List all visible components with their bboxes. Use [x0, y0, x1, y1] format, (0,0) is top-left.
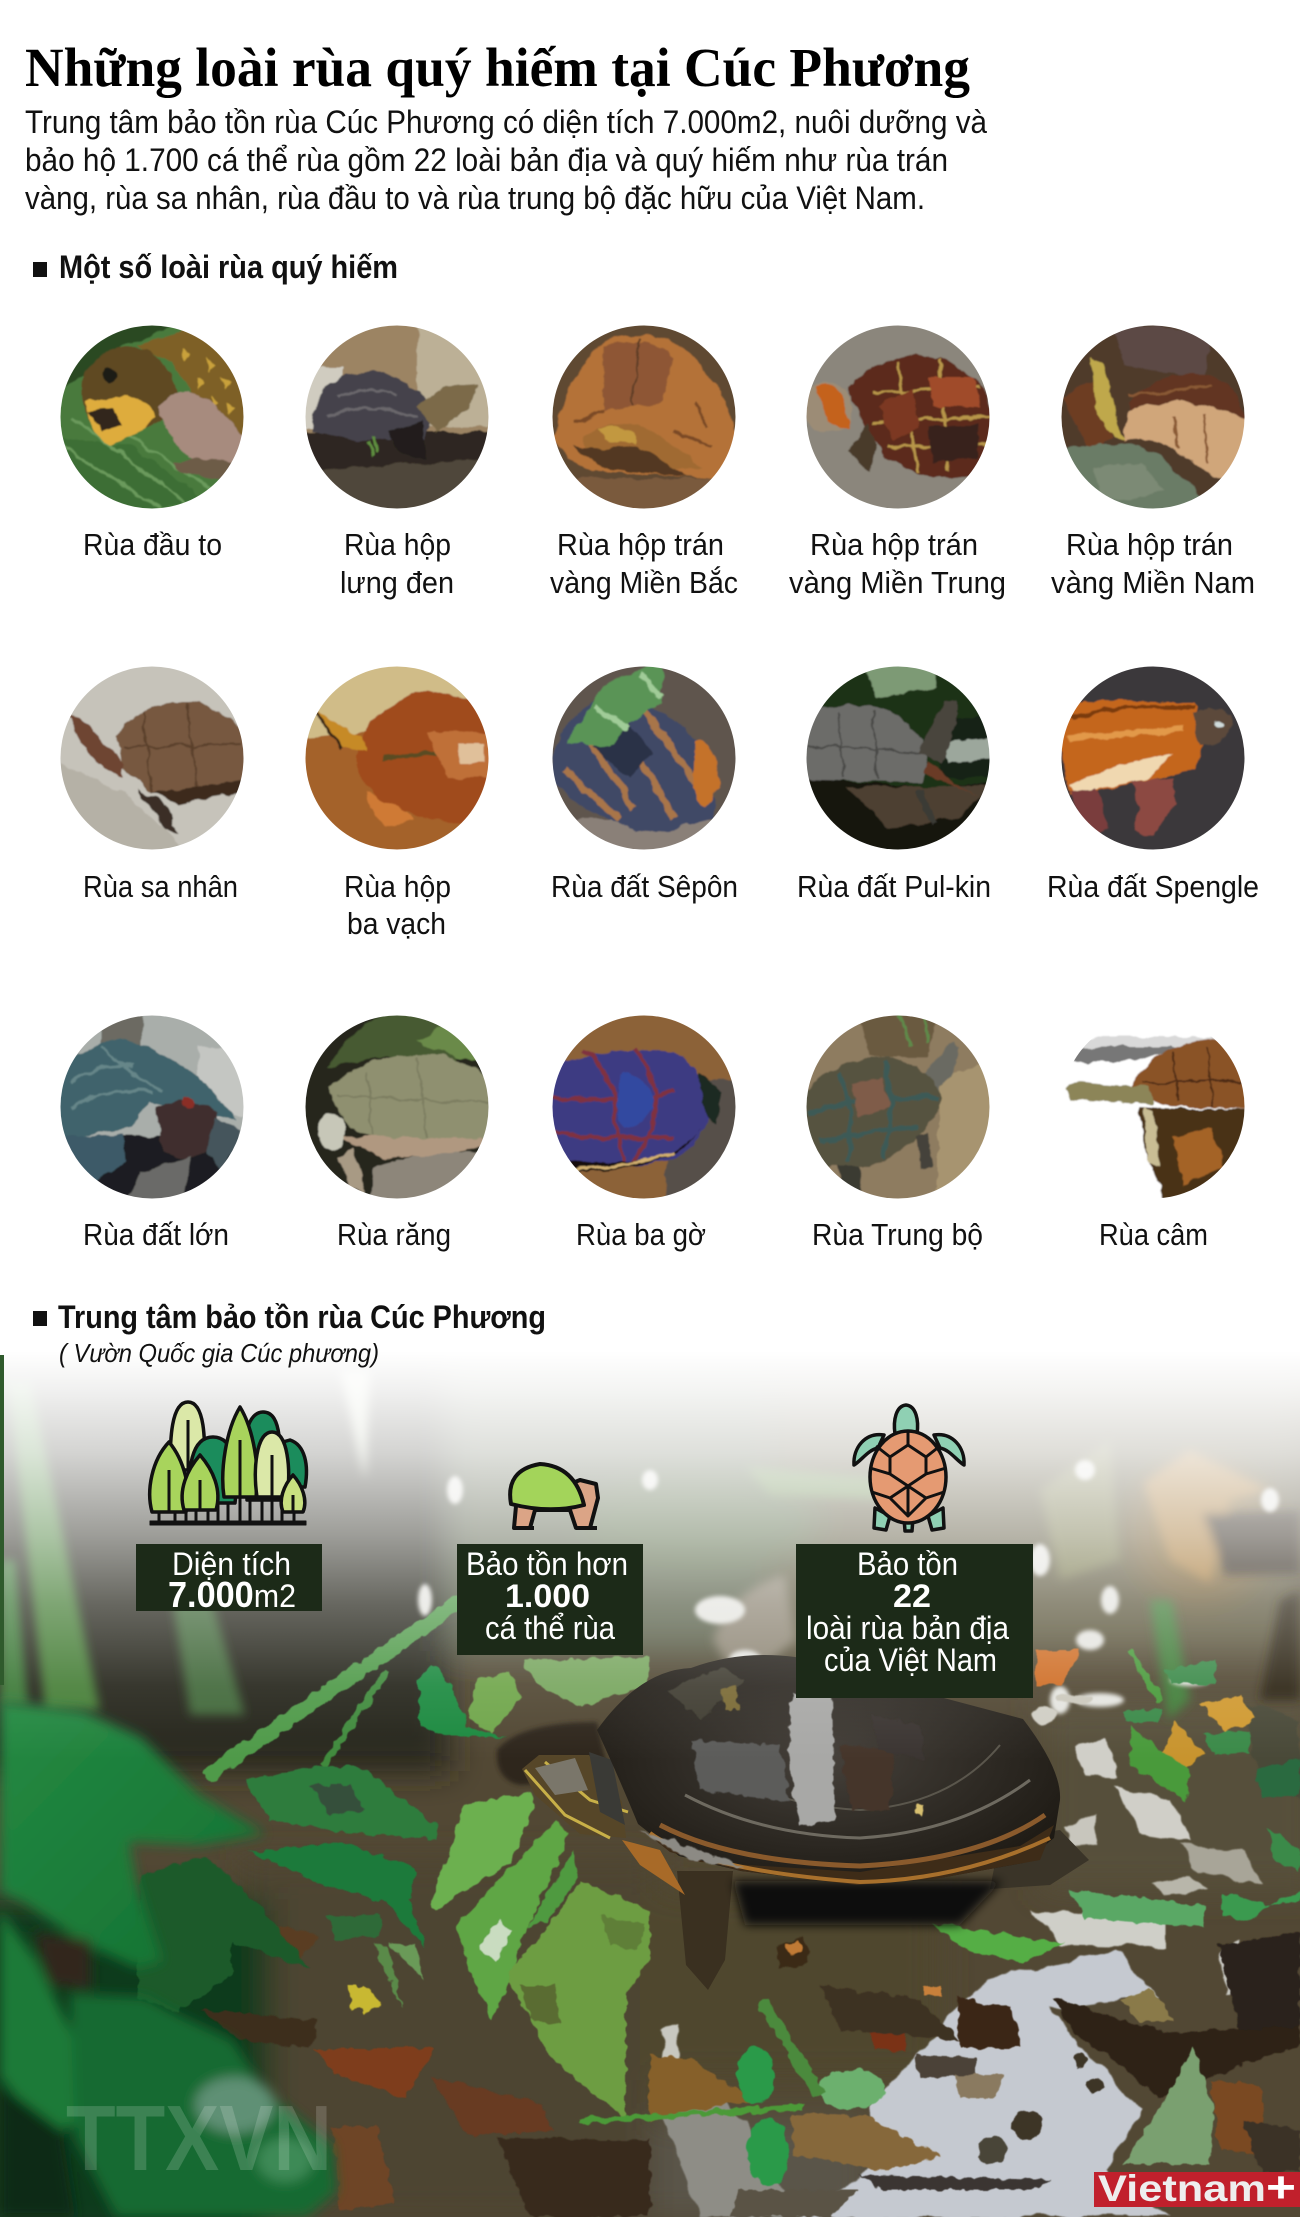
- labels: row 3: Rùa ba gờ: [576, 1217, 706, 1252]
- stat box: area: Diện tích: [172, 1546, 291, 1582]
- photo: Rùa ba gờ: [552, 1016, 736, 1198]
- labels: row 3: Rùa Trung bộ: [812, 1217, 983, 1252]
- stat box: individuals: Bảo tồn hơn: [466, 1546, 628, 1582]
- photo: Rùa hộp lưng đen: [306, 326, 488, 508]
- photo: Rùa hộp trán vàng Miền Bắc: [552, 326, 736, 508]
- section heading: species: Một số loài rùa quý hiếm: [59, 249, 398, 285]
- watermark: TTXVN: [66, 2086, 332, 2190]
- logo: Vietnam+: Vietnam: [1098, 2168, 1266, 2209]
- intro paragraph: bảo hộ 1.700 cá thể rùa gồm 22 loài bản địa và quý hiếm như rùa trán: [25, 142, 948, 178]
- labels: row 1: vàng Miền Trung: [789, 565, 1006, 600]
- labels: row 3: Rùa răng: [337, 1217, 451, 1252]
- labels: row 2: Rùa đất Sêpôn: [551, 869, 738, 904]
- white fade over top of the photo: [0, 1351, 1300, 1761]
- labels: row 1: Rùa hộp: [344, 527, 451, 562]
- blurred colour field: [0, 1445, 1293, 2217]
- labels: row 3: Rùa câm: [1099, 1217, 1208, 1252]
- photo: Rùa đất Sêpôn: [552, 666, 736, 850]
- labels: row 3: Rùa đất lớn: [83, 1217, 229, 1252]
- foreground blurred leaves: [0, 1701, 336, 2217]
- logo: Vietnam+: +: [1266, 2163, 1296, 2212]
- stat box: individuals: [457, 1544, 643, 1655]
- stat box: species: Bảo tồn: [857, 1546, 958, 1582]
- logo: Vietnam+: [1094, 2163, 1300, 2212]
- stat box: individuals: cá thể rùa: [485, 1610, 615, 1646]
- labels: row 1: vàng Miền Nam: [1051, 565, 1255, 600]
- stat box: individuals: 1.000: [505, 1578, 590, 1614]
- photo: Rùa đất lớn: [60, 1016, 244, 1198]
- labels: row 2: Rùa đất Spengle: [1047, 869, 1259, 904]
- labels: row 1: Rùa hộp trán: [1066, 527, 1233, 562]
- muddy debris: [200, 1925, 1300, 2217]
- subheading: ( Vườn Quốc gia Cúc phương): [59, 1338, 379, 1368]
- section heading: conservation centre: Trung tâm bảo tồn rùa Cúc Phương: [58, 1299, 546, 1335]
- labels: row 1: Rùa hộp trán: [557, 527, 724, 562]
- labels: row 2: Rùa sa nhân: [83, 869, 238, 904]
- stat box: species: 22: [893, 1578, 931, 1614]
- labels: row 2: Rùa hộp: [344, 869, 451, 904]
- labels: row 1: [83, 527, 1255, 600]
- stat box: species: [796, 1544, 1033, 1698]
- mid-ground leaves: [137, 1604, 1300, 2185]
- photo: Rùa đầu to: [60, 326, 244, 508]
- labels: row 1: lưng đen: [340, 565, 454, 600]
- water reflections: [660, 1694, 1300, 2217]
- photo: Rùa câm: [1064, 1035, 1244, 1198]
- photo: Rùa hộp trán vàng Miền Trung: [806, 326, 990, 508]
- labels: row 2: ba vạch: [347, 906, 446, 941]
- stat box: species: loài rùa bản địa: [806, 1610, 1009, 1646]
- stat box: area: 7.000m2: [168, 1574, 296, 1615]
- icon: small turtle: [510, 1464, 598, 1528]
- photo: Rùa răng: [306, 1016, 488, 1198]
- labels: row 2: Rùa đất Pul-kin: [797, 869, 991, 904]
- icon: sea turtle: [854, 1405, 964, 1531]
- top droplets: [418, 1460, 1279, 1714]
- photo: Rùa đất Spengle: [1062, 666, 1244, 850]
- photo: Rùa hộp trán vàng Miền Nam: [1062, 326, 1244, 508]
- background photo: turtle in stream: [0, 1351, 1300, 2217]
- title: Những loài rùa quý hiếm tại Cúc Phương: [25, 37, 970, 98]
- intro paragraph: vàng, rùa sa nhân, rùa đầu to và rùa trung bộ đặc hữu của Việt Nam.: [25, 180, 925, 216]
- stat box: species: của Việt Nam: [824, 1642, 997, 1678]
- labels: row 1: vàng Miền Bắc: [550, 565, 738, 600]
- labels: row 1: Rùa hộp trán: [810, 527, 978, 562]
- intro paragraph: [25, 104, 987, 216]
- icon: trees: [150, 1402, 306, 1525]
- labels: row 3: [83, 1217, 1208, 1252]
- stat box: area: [136, 1544, 322, 1615]
- photo: Rùa Trung bộ: [806, 1016, 990, 1198]
- photo: Rùa hộp ba vạch: [306, 666, 488, 850]
- photo: Rùa sa nhân: [60, 666, 244, 850]
- background foliage and debris: [0, 1370, 1300, 1720]
- main turtle: [497, 1655, 1089, 1990]
- labels: row 1: Rùa đầu to: [83, 527, 222, 562]
- labels: row 2: [83, 869, 1259, 941]
- intro paragraph: Trung tâm bảo tồn rùa Cúc Phương có diện tích 7.000m2, nuôi dưỡng và: [25, 104, 987, 140]
- photo edge: [0, 1355, 4, 1685]
- photo: Rùa đất Pul-kin: [806, 666, 990, 850]
